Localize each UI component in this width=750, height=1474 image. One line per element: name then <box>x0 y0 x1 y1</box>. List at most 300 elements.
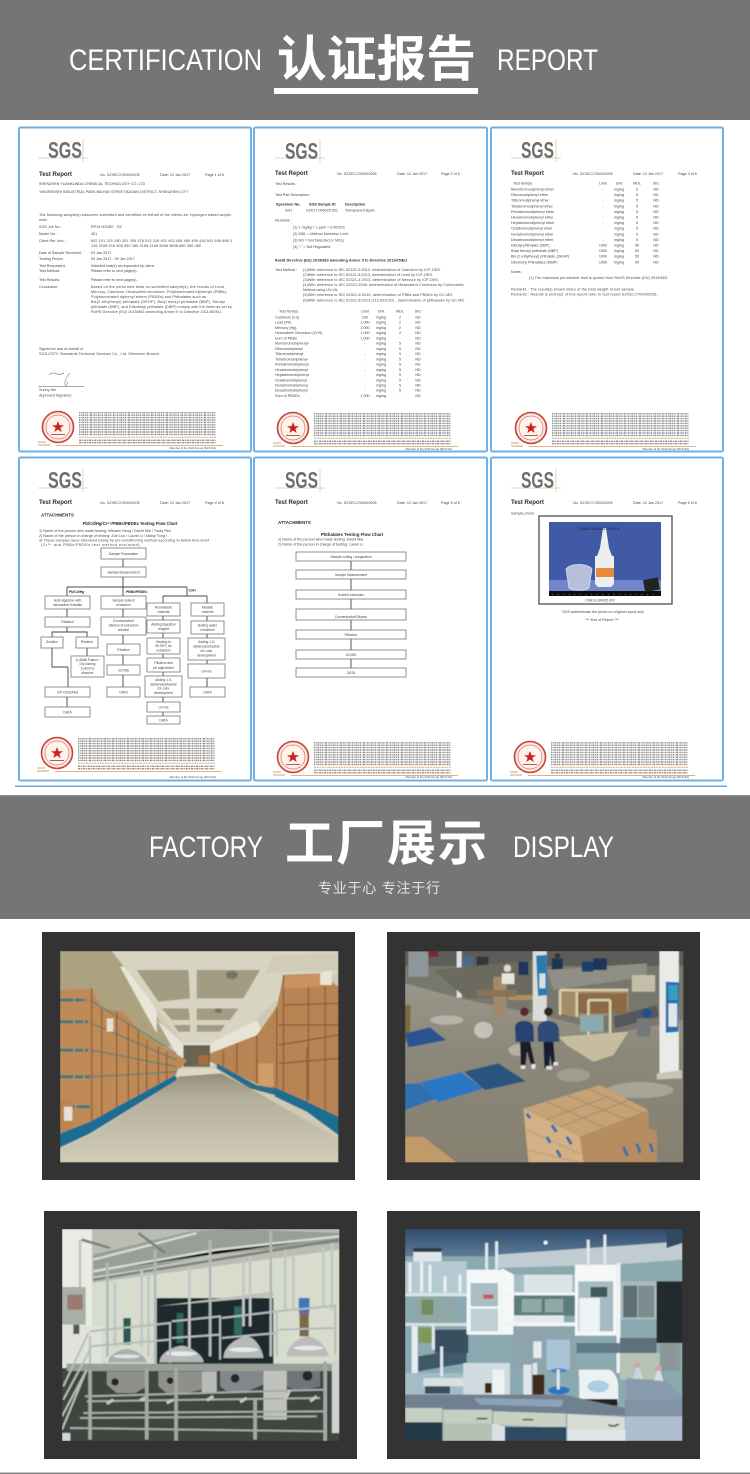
flow chart: diphenylcarbazide <box>150 682 177 686</box>
report header line: Page 3 of 6 <box>678 172 697 176</box>
results table: 5 <box>636 232 638 236</box>
results table: - <box>602 204 604 208</box>
report header line: Test Report <box>275 500 308 506</box>
applicant and sample details: 126 3108 516 505 590 385 3165 3168 5908 9898 860 380 480 <box>91 244 201 248</box>
results table: 5 <box>399 389 401 393</box>
results table: mg/kg <box>614 249 624 253</box>
results table: mg/kg <box>614 255 624 259</box>
applicant and sample details <box>39 182 232 282</box>
specimen description: (3) ND = Not Detected (< MDL) <box>293 238 344 242</box>
panel: certificate page 1 <box>19 128 251 452</box>
report header line: No. SZXEC1700002005 <box>100 501 140 505</box>
notes and remarks: Notes : <box>511 270 523 274</box>
results table: Pentabromobiphenyl <box>275 363 309 367</box>
results table: mg/kg <box>614 244 624 248</box>
report header line: Date: 12 Jan 2017 <box>160 173 190 177</box>
conclusion text: phthalate (DBP), and Diisobutyl phthalate (DIBP) comply with the limits as set by <box>91 305 232 309</box>
flow chart: Filtration <box>345 633 357 637</box>
results table: 5 <box>399 378 401 382</box>
results table <box>275 310 421 398</box>
notes and remarks: (1) The maximum permissible limit is quoted from RoHS Directive (EU) 2015/863. <box>529 276 668 280</box>
attachments intro text: 2) Name of the person in charge of testing: Zoe Luo / Laurel Li / Maisy Tong / <box>39 534 168 538</box>
results table: 2 <box>399 331 401 335</box>
SGS logo: SGS <box>285 138 318 164</box>
results table: 5 <box>636 204 638 208</box>
flow chart: DATA <box>63 710 72 714</box>
results table: ND <box>415 378 421 382</box>
results table: mg/kg <box>614 238 624 242</box>
flow chart: Concentration/ <box>113 619 134 623</box>
results table: 5 <box>636 199 638 203</box>
SGS logo: SGS <box>521 137 554 163</box>
results table: - <box>602 193 604 197</box>
results table: Test Item(s) <box>513 182 532 186</box>
results table: Hexabromobiphenyl <box>275 368 308 372</box>
flow chart: Adding 1,5- <box>155 678 172 682</box>
seal and fine print <box>510 742 695 779</box>
photo card: warehouse <box>42 932 355 1180</box>
results table: Lead (Pb) <box>275 321 291 325</box>
results table: Tribromobiphenyl <box>275 352 304 356</box>
attachments intro text <box>278 520 384 546</box>
signature block <box>38 347 159 398</box>
heading: REPORT: REPORT <box>497 44 598 77</box>
flow chart: diphenylcarbazide <box>193 644 220 648</box>
report header line <box>275 171 460 177</box>
results table: - <box>364 378 366 382</box>
results table: 2 <box>399 326 401 330</box>
seal and fine print: Member of the SGS Group (SGS SA) <box>643 775 689 779</box>
flow chart: extraction <box>116 603 131 607</box>
results table: Hexavalent Chromium (CrVI) <box>275 331 322 335</box>
report header line <box>39 172 224 178</box>
flow chart: DATA <box>203 690 212 694</box>
flow chart: Cr6+ <box>188 588 196 592</box>
results table: ND <box>415 331 421 335</box>
report header line: Date: 12 Jan 2017 <box>633 501 663 505</box>
report header line <box>39 500 224 506</box>
seal and fine print: Member of the SGS Group (SGS SA) <box>643 447 689 451</box>
results table: mg/kg <box>376 384 386 388</box>
results table: mg/kg <box>376 342 386 346</box>
results table: Heptabromobiphenyl <box>275 373 309 377</box>
results table: mg/kg <box>614 216 624 220</box>
report header line: No. SZXEC1700002005 <box>573 172 613 176</box>
results table: - <box>364 368 366 372</box>
results table: 001 <box>415 310 421 314</box>
results table: ND <box>415 347 421 351</box>
flow chart: 90-95℃ for <box>155 644 173 648</box>
report header line: Page 4 of 6 <box>205 501 224 505</box>
applicant and sample details: Test Results: <box>39 278 60 282</box>
test method text: Method using UV-Vis. <box>303 288 338 292</box>
results table: ND <box>653 193 659 197</box>
test method text: (6)With reference to IEC 62321-8:2013 (111/321/CD) , determination of phthalates by GC-MS. <box>303 298 465 302</box>
results table: ND <box>415 321 421 325</box>
results table: 1,000 <box>360 321 370 325</box>
specimen description: Transparent liquid <box>345 208 374 212</box>
heading: 认证报告: 认证报告 <box>277 33 476 87</box>
results table: ND <box>415 342 421 346</box>
applicant and sample details: Test Method: <box>39 269 60 273</box>
results table: 1,000 <box>360 331 370 335</box>
flow chart: Filtration <box>61 620 74 624</box>
seal and fine print: Member of the SGS Group (SGS SA) <box>170 446 216 450</box>
flow chart: Boiling water <box>198 624 218 628</box>
flow chart: reagent <box>158 627 169 631</box>
panel: certificate page 2 <box>254 128 487 452</box>
results table: Nonabromobiphenyl <box>275 384 308 388</box>
flow chart: microwave/ hotplate <box>53 603 82 607</box>
test method text: (4)With reference to IEC 62321:2008, determination of Hexavalent Chromium by Colorimetric <box>303 283 464 287</box>
report header line: Date: 12 Jan 2017 <box>160 501 190 505</box>
results table: 5 <box>399 368 401 372</box>
flow chart: extraction <box>200 628 215 632</box>
photo note <box>562 610 644 622</box>
results table: ND <box>653 199 659 203</box>
heading: CERTIFICATION: CERTIFICATION <box>69 44 262 77</box>
flow chart: UV-Vis <box>158 706 169 710</box>
results table: Cadmium (Cd) <box>275 316 299 320</box>
results table: - <box>602 227 604 231</box>
results table: Dibutyl phthalate (DBP) <box>511 244 550 248</box>
results table: ND <box>415 363 421 367</box>
results table: mg/kg <box>376 373 386 377</box>
attachments intro text: 1) Name of the person who made testing: David Mai <box>278 538 363 542</box>
results table: mg/kg <box>376 363 386 367</box>
results table: 5 <box>636 193 638 197</box>
attachments intro text: 1) Name of the person who made testing: Winwen Deng / David Mai / Trudy Ren <box>39 529 171 533</box>
flow chart: Acid digestion with <box>54 598 81 602</box>
results table: Decabromodiphenyl ether <box>511 238 554 242</box>
applicant and sample details: SGS Job No. : <box>39 225 63 229</box>
specimen description: Specimen No. <box>276 202 300 206</box>
SGS logo: SGS <box>285 467 318 493</box>
specimen description: (4) "-" = Not Regulated <box>293 245 330 249</box>
seal and fine print: Member of the SGS Group (SGS SA) <box>406 775 452 779</box>
flow chart: Sample Measurement <box>335 573 367 577</box>
flow chart: UV-Vis <box>201 670 212 674</box>
results table: 2 <box>399 316 401 320</box>
results table: mg/kg <box>376 357 386 361</box>
attachments intro text: 3) These samples were dissolved totally by pre-conditioning method according to below flow chart <box>39 538 209 542</box>
results table: - <box>399 336 401 340</box>
results table: 5 <box>399 342 401 346</box>
results table: mg/kg <box>614 188 624 192</box>
test method text: (1)With reference to IEC 62321-5:2013, determination of Cadmium by ICP-OES. <box>303 268 441 272</box>
results table: ND <box>653 210 659 214</box>
photo note: *** End of Report *** <box>585 618 619 622</box>
results table: mg/kg <box>376 347 386 351</box>
results table: 1,000 <box>360 326 370 330</box>
results table: - <box>364 357 366 361</box>
specimen description: SGS Sample ID <box>309 202 336 206</box>
specimen description <box>275 182 374 249</box>
results table: 5 <box>636 227 638 231</box>
seal and fine print <box>273 742 458 779</box>
RoHS directive heading: RoHS Directive (EU) 2015/863 amending Annex II to Directive 2011/65/EU <box>275 258 407 262</box>
results table: Unit <box>378 310 384 314</box>
applicant and sample details: Selected test(s) as requested by client. <box>91 264 155 268</box>
results table: 5 <box>636 238 638 242</box>
results table: - <box>602 232 604 236</box>
attachments intro text: ATTACHMENTS <box>41 512 74 518</box>
results table: 2 <box>399 321 401 325</box>
test method text <box>275 268 465 302</box>
report header line: No. SZXEC1700002005 <box>573 501 613 505</box>
attachments intro text: Pb/Cd/Hg/Cr⁶⁺/PBBs/PBDEs Testing Flow Chart <box>83 521 178 526</box>
results table: Nonabromodiphenyl ether <box>511 232 554 236</box>
report header line <box>511 500 697 506</box>
results table: mg/kg <box>376 389 386 393</box>
applicant and sample details: The following sample(s) was/were submitted and identified on behalf of the clients as: Hydrogen based acrylic <box>39 213 231 217</box>
results table: 1,000 <box>360 336 370 340</box>
results table: ND <box>415 357 421 361</box>
results table: 1000 <box>599 249 607 253</box>
bottom edge line <box>0 1472 750 1474</box>
flow chart: Nonmetallic <box>155 606 172 610</box>
results table: mg/kg <box>376 331 386 335</box>
attachments intro text: (Cr⁶⁺ and PBBs/PBDEs test method excluded). <box>41 543 141 547</box>
results table: Tetrabromobiphenyl <box>275 357 308 361</box>
flow chart: PBBs/PBDEs <box>126 590 147 594</box>
results table: - <box>399 394 401 398</box>
results table: Limit <box>361 310 369 314</box>
results table: - <box>602 221 604 225</box>
results table: Octabromodiphenyl ether <box>511 227 553 231</box>
results table: Heptabromodiphenyl ether <box>511 221 555 225</box>
SGS logo <box>38 137 88 163</box>
results table: Hexabromodiphenyl ether <box>511 216 554 220</box>
section divider line <box>15 786 727 787</box>
results table: - <box>602 216 604 220</box>
results table: Tetrabromodiphenyl ether <box>511 204 554 208</box>
results table: mg/kg <box>614 260 624 264</box>
results table: mg/kg <box>376 368 386 372</box>
specimen description: SZK17-000025.001 <box>306 208 338 212</box>
panel: certificate page 3 <box>491 128 723 452</box>
flow chart: Sample cutting / preparation <box>330 555 372 559</box>
flow chart: Sample Measurement <box>107 570 140 574</box>
results table: - <box>602 238 604 242</box>
attachments intro text: 2) Name of the person in charge of testing: Laurel Li <box>278 542 363 546</box>
signature block: Sunny Nie <box>39 388 56 392</box>
results table: 1000 <box>599 260 607 264</box>
results table: mg/kg <box>376 352 386 356</box>
seal and fine print <box>273 412 458 451</box>
report header line: Page 5 of 6 <box>441 501 460 505</box>
results table: 50 <box>635 260 639 264</box>
results table: - <box>364 342 366 346</box>
notes and remarks: Remark2 : Results & photo(s) of this report refer to test report SZXEC1700002061. <box>511 292 658 296</box>
results table: mg/kg <box>614 210 624 214</box>
flow chart: Concentration/Dilution <box>335 615 367 619</box>
flow chart: 1) Alkali Fusion / <box>75 658 100 662</box>
panel: certificate page 5 flow chart <box>254 458 487 780</box>
results table: 50 <box>635 249 639 253</box>
specimen description: (1) 1 mg/kg = 1 ppm = 0.0001% <box>293 226 346 230</box>
heading: 工厂展示: 工厂展示 <box>285 817 487 871</box>
flow chart: material <box>202 610 214 614</box>
results table: Unit <box>616 182 622 186</box>
flow chart: 2) Acid to <box>81 666 95 670</box>
applicant and sample details: Test Requested: <box>39 264 66 268</box>
sample photo: glue bottle and cup: CAB13-180425.002 <box>585 598 615 602</box>
SGS logo: SGS <box>48 467 82 493</box>
flow chart: development <box>154 691 173 695</box>
results table: ND <box>415 326 421 330</box>
results table: 1000 <box>599 255 607 259</box>
results table: ND <box>653 255 659 259</box>
report header line: Test Report <box>511 500 544 506</box>
flow chart: Sample solvent <box>112 598 135 602</box>
results table: 1,000 <box>360 394 370 398</box>
specimen description: (2) MDL = Method Detection Limit <box>293 232 348 236</box>
results table: 5 <box>636 221 638 225</box>
results table: 5 <box>636 216 638 220</box>
results table: 001 <box>653 182 659 186</box>
results table: ND <box>653 216 659 220</box>
results table: 1000 <box>599 244 607 248</box>
test method text: (5)With reference to IEC 62321-6:2015, determination of PBBs and PBDEs by GC-MS. <box>303 293 453 297</box>
results table: - <box>364 384 366 388</box>
conclusion text: Polybrominated diphenyl ethers (PBDEs) and Phthalates such as <box>91 295 206 299</box>
results table: - <box>364 352 366 356</box>
results table: - <box>364 363 366 367</box>
attachments intro text <box>39 512 209 547</box>
header band: factory display <box>0 795 750 919</box>
results table: ND <box>415 316 421 320</box>
seal and fine print <box>511 412 696 451</box>
heading: FACTORY: FACTORY <box>149 831 263 864</box>
results table: 5 <box>399 373 401 377</box>
flow chart: solution <box>118 628 129 632</box>
results table: - <box>364 373 366 377</box>
panel: certificate page 6 sample photo <box>491 458 723 780</box>
flow chart: GC/MS <box>118 668 130 672</box>
report header line: Page 6 of 6 <box>678 501 697 505</box>
signature block: SGS-CSTC Standards Technical Services Co., Ltd. Shenzhen Branch <box>39 352 159 356</box>
results table: ND <box>415 352 421 356</box>
results table: Diisobutyl Phthalates (DIBP) <box>511 260 558 264</box>
results table: 5 <box>399 363 401 367</box>
results table: ND <box>415 373 421 377</box>
notes and remarks <box>511 270 668 296</box>
specimen description: Remarks : <box>275 218 292 222</box>
specimen description: Test Part Description : <box>275 193 311 197</box>
results table: ND <box>415 389 421 393</box>
photo card: production floor <box>387 932 700 1180</box>
subtitle: 专业于心 专注于行 <box>318 880 440 896</box>
results table: Decabromobiphenyl <box>275 389 308 393</box>
results table: - <box>364 389 366 393</box>
applicant and sample details: 03 Jan 2017 <box>91 251 111 255</box>
results table: Pentabromodiphenyl ether <box>511 210 555 214</box>
report header line: Test Report <box>275 171 308 177</box>
seal and fine print: Member of the SGS Group (SGS SA) <box>406 447 452 451</box>
results table: mg/kg <box>376 326 386 330</box>
results table: 50 <box>635 244 639 248</box>
results table: Limit <box>599 182 607 186</box>
results table: mg/kg <box>614 204 624 208</box>
flow chart: DATA <box>159 718 168 722</box>
results table: ND <box>415 394 421 398</box>
results table: 5 <box>399 384 401 388</box>
results table: mg/kg <box>614 232 624 236</box>
photo card: reactor tanks <box>44 1211 357 1459</box>
results table: 5 <box>399 347 401 351</box>
seal and fine print <box>38 412 223 450</box>
applicant and sample details: Date of Sample Received : <box>39 251 83 255</box>
results table: Test Item(s) <box>279 310 298 314</box>
applicant and sample details: RP19-001857 - SZ <box>91 225 122 229</box>
results table: 5 <box>399 357 401 361</box>
seal and fine print <box>37 738 222 779</box>
report header line: Date: 12 Jan 2017 <box>397 172 427 176</box>
report header line: Date: 12 Jan 2017 <box>633 172 663 176</box>
flow chart: Heating to <box>156 640 171 644</box>
applicant and sample details: resin <box>39 218 47 222</box>
results table: mg/kg <box>614 199 624 203</box>
header band: certification report <box>0 0 750 120</box>
specimen description: Test Results : <box>275 182 297 186</box>
photo card: laboratory <box>387 1211 700 1459</box>
test method text: (2)With reference to IEC 62321-5:2013, determination of Lead by ICP-OES. <box>303 273 433 277</box>
results table: 5 <box>636 188 638 192</box>
results table: MDL <box>633 182 641 186</box>
flow chart: Metallic <box>202 606 213 610</box>
flow chart <box>41 548 225 724</box>
SGS logo <box>511 467 561 493</box>
flow chart: Solution <box>46 640 58 644</box>
conclusion text: Conclusion: <box>39 285 58 289</box>
results table: ND <box>653 232 659 236</box>
results table: MDL <box>396 310 404 314</box>
applicant and sample details: SHENZHEN YUANKUNDA CHEMICAL TECHNOLOGY CO.,LTD <box>39 182 145 186</box>
sample photo: glue bottle and cup: CAB13-180425.002 8.5 <box>578 526 621 531</box>
results table: Dibromodiphenyl ether <box>511 193 549 197</box>
results table: Mercury (Hg) <box>275 326 297 330</box>
results table: mg/kg <box>614 193 624 197</box>
flow chart: for color <box>158 686 170 690</box>
flow chart: development <box>197 654 216 658</box>
photo note: SGS authenticate the photo on original report only <box>562 610 644 614</box>
results table: Sum of PBBs <box>275 336 297 340</box>
report header line: Date: 12 Jan 2017 <box>397 501 427 505</box>
results table: mg/kg <box>614 221 624 225</box>
applicant and sample details: Client Ref. Info. : <box>39 239 66 243</box>
report header line: Test Report <box>511 171 544 177</box>
signature block: Signed for and on behalf of <box>39 347 84 351</box>
flow chart <box>296 552 406 677</box>
applicant and sample details: 401 <box>91 232 97 236</box>
sample photo label: Sample photo: <box>511 512 535 516</box>
SGS logo: SGS <box>521 467 554 493</box>
applicant and sample details: 502 101 201 260 301 395 378 513 316 401 403 406 460 495 436 501 606 696 3 <box>91 239 232 243</box>
flow chart: Solvent extraction <box>338 593 364 597</box>
applicant and sample details: YINGRENSHI INDUSTRIAL PARK,BAIYAN STREET,BAOAN DISTRICT, SHENZHEN CITY <box>39 190 189 194</box>
results table: mg/kg <box>376 336 386 340</box>
SGS logo <box>511 137 561 163</box>
SGS logo: SGS <box>48 137 82 163</box>
results table: 5 <box>399 352 401 356</box>
flow chart: extraction <box>156 648 171 652</box>
results table: 50 <box>635 255 639 259</box>
results table: ND <box>653 249 659 253</box>
conclusion text: Bis(2-ethylhexyl) phthalate (DEHP), Butyl benzyl phthalate (BBP), Dibutyl <box>91 300 225 304</box>
flow chart: GC/MS <box>346 653 357 657</box>
results table: - <box>364 347 366 351</box>
